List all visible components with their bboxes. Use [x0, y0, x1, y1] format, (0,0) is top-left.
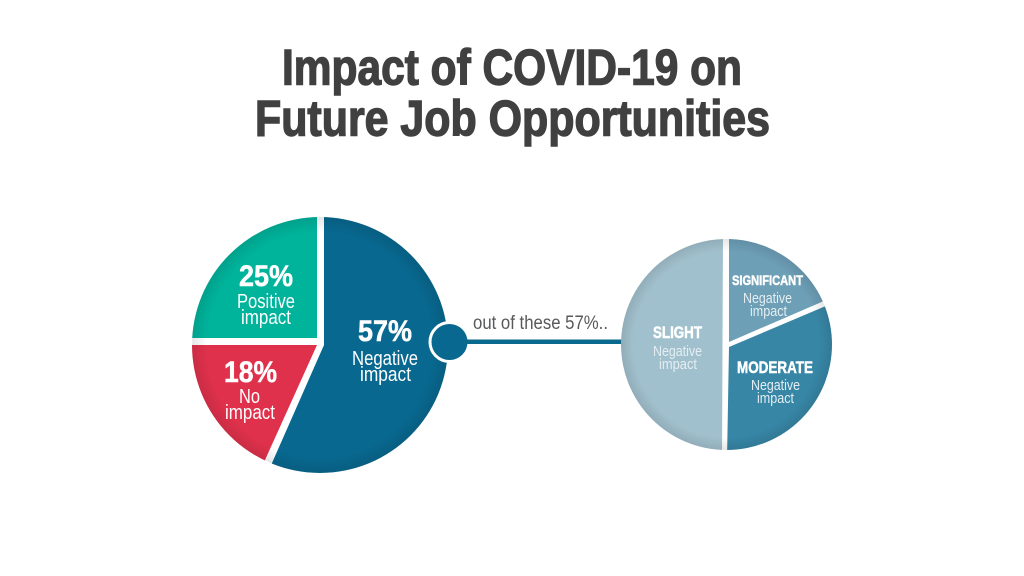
- label: moderate: Negative: [751, 377, 800, 394]
- pie chart: overall impact: [192, 217, 447, 473]
- slice: positive impact 25%: [192, 217, 317, 338]
- label: 25% positive impact: Positive: [237, 291, 295, 313]
- label: slight: Negative: [653, 343, 702, 360]
- slice: no impact 18%: [192, 345, 317, 460]
- slice: slight: [621, 239, 723, 450]
- edge shading: [192, 217, 448, 473]
- label: slight: SLIGHT: [653, 323, 702, 342]
- label: 57% negative impact: 57%: [358, 315, 412, 348]
- label: 25% positive impact: impact: [241, 307, 291, 329]
- title: Future Job Opportunities: [255, 90, 770, 146]
- edge shading: [621, 239, 832, 450]
- label: 25% positive impact: 25%: [239, 260, 293, 293]
- label: 25% positive impact: [237, 260, 295, 329]
- label: 57% negative impact: Negative: [352, 348, 418, 370]
- label: 18% no impact: 18%: [224, 356, 277, 389]
- label: slight: [653, 323, 702, 373]
- slice: negative impact 57%: [272, 217, 447, 473]
- label: 18% no impact: No: [239, 386, 260, 408]
- label: 18% no impact: impact: [225, 402, 275, 424]
- label: significant: Negative: [743, 290, 792, 307]
- label: significant: [732, 272, 803, 320]
- pie chart: breakdown of negative impact: [621, 239, 832, 450]
- title: [255, 40, 770, 146]
- connector node: [430, 322, 469, 362]
- label: moderate: [737, 358, 813, 407]
- slice: moderate: [727, 306, 832, 450]
- label: significant: SIGNIFICANT: [732, 272, 803, 288]
- label: 57% negative impact: [352, 315, 418, 386]
- label: slight: impact: [659, 356, 698, 373]
- title: Impact of COVID-19 on: [282, 40, 742, 96]
- label: significant: impact: [750, 303, 788, 320]
- label: moderate: MODERATE: [737, 358, 813, 377]
- connector line: [464, 340, 624, 344]
- connector label: out of these 57%..: [473, 313, 608, 334]
- label: 57% negative impact: impact: [360, 364, 411, 386]
- label: 18% no impact: [224, 356, 277, 424]
- label: moderate: impact: [757, 390, 795, 407]
- slice: significant: [729, 239, 823, 342]
